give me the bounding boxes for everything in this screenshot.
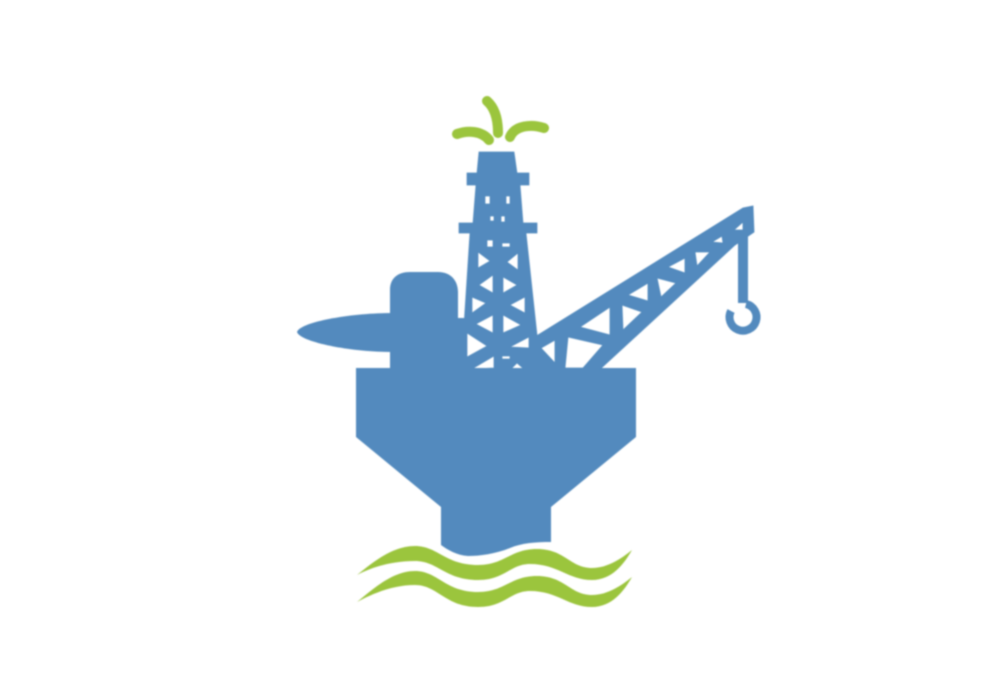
icon: hull bbox=[356, 368, 636, 556]
icon: helipad bbox=[297, 313, 392, 352]
platform illustration bbox=[297, 101, 757, 607]
icon: crane cable bbox=[738, 231, 748, 303]
icon: waves bbox=[357, 546, 632, 607]
icon: derrick tower bbox=[459, 152, 541, 372]
icon: crane boom bbox=[530, 206, 754, 372]
icon: superstructure bbox=[390, 272, 466, 372]
icon: crane hook bbox=[730, 304, 757, 331]
icon: oil flame bbox=[457, 101, 544, 140]
